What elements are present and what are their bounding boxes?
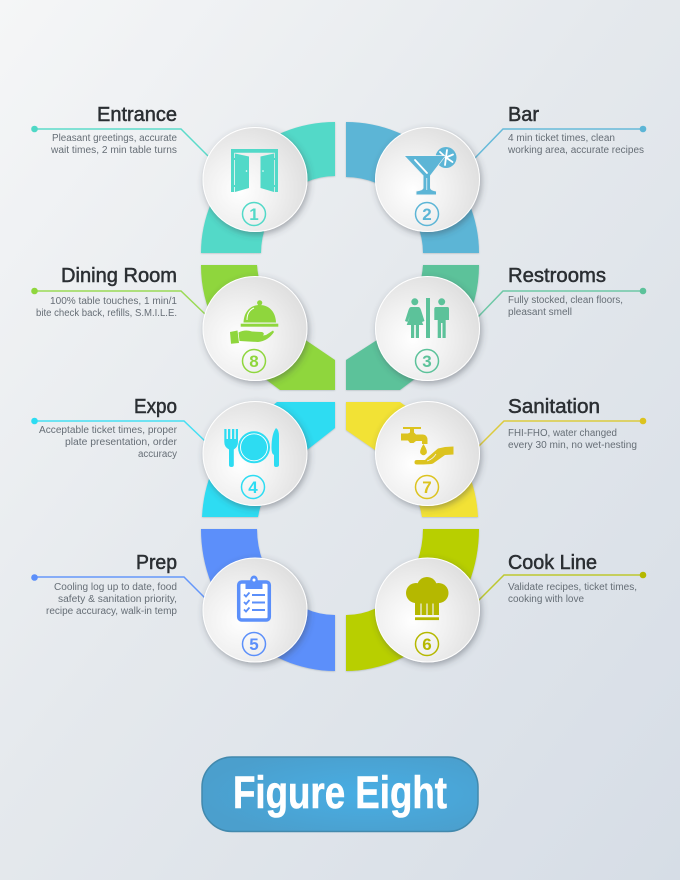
text: Prep details: safety & sanitation priority, [58, 594, 177, 605]
number 1: 1 [249, 205, 259, 224]
ring segment 6 [346, 529, 479, 671]
icon: martini [405, 147, 456, 194]
heading: Expo: Expo [134, 396, 177, 418]
circle 2 [376, 128, 480, 232]
heading: Bar: Bar [508, 104, 539, 126]
text: Restrooms details: pleasant smell [508, 307, 572, 318]
title banner: Figure Eight [202, 757, 478, 832]
ring segment 1 [201, 122, 335, 253]
heading: Prep: Prep [136, 552, 177, 574]
panel: 7 Sanitation [346, 396, 646, 517]
panel: 1 Entrance [31, 104, 335, 253]
text: Restrooms details: Fully stocked, clean floors, [508, 295, 623, 306]
leader line 6 [478, 572, 646, 601]
text: Sanitation details: every 30 min, no wet-nesting [508, 440, 637, 451]
text: Cook Line details: cooking with love [508, 594, 584, 605]
heading: Sanitation: Sanitation [508, 396, 600, 418]
number 6 [416, 632, 438, 656]
text: Dining Room details: 100% table touches, 1 min/1 [50, 296, 177, 307]
text: Expo details: accuracy [138, 449, 177, 460]
circle 1 [203, 128, 307, 232]
panel: 2 Bar [346, 104, 646, 253]
text: Cook Line details: Validate recipes, ticket times, [508, 582, 637, 593]
circle 6 [376, 558, 480, 662]
ring segment 7 [346, 402, 478, 517]
icon: clipboard checklist [239, 576, 269, 620]
icon: doors [231, 149, 278, 192]
text: Bar details [507, 133, 644, 156]
text: Dining Room details [36, 296, 177, 319]
leader line 4 [31, 418, 205, 441]
text: Sanitation details [508, 428, 637, 451]
leader line 3 [478, 288, 646, 317]
circle 3 [376, 276, 480, 380]
circle 5 [203, 558, 307, 662]
circle 4 [203, 402, 307, 506]
number 2: 2 [422, 205, 432, 224]
number 4 [242, 476, 264, 498]
panel: 3 Restrooms [346, 265, 646, 390]
number 4: 4 [248, 478, 258, 497]
text: Expo details: plate presentation, order [65, 437, 178, 448]
number 7: 7 [422, 478, 432, 497]
panel: 6 Cook Line [346, 529, 646, 671]
number 6: 6 [422, 635, 432, 654]
leader line 7 [479, 418, 646, 446]
text: Expo details: Acceptable ticket times, proper [39, 425, 178, 436]
panel: 8 Dining Room [31, 265, 335, 390]
number 5: 5 [249, 635, 259, 654]
icon: fork, plate and knife [224, 428, 279, 467]
text: Restrooms details [508, 295, 623, 318]
text: Entrance details: Pleasant greetings, accurate [52, 133, 177, 144]
leader line 1 [31, 126, 208, 156]
ring segment 8 [201, 265, 335, 390]
text: Sanitation details: FHI-FHO, water changed [508, 428, 617, 439]
text: Entrance details [50, 133, 177, 156]
icon: cloche and hand [230, 300, 278, 344]
number 2 [416, 202, 438, 226]
number 3 [416, 350, 438, 372]
heading: Restrooms: Restrooms [508, 265, 606, 287]
text: Entrance details: wait times, 2 min table turns [50, 145, 177, 156]
ring segment 2 [346, 122, 479, 253]
icon: chef hat [406, 577, 448, 620]
heading: Entrance: Entrance [97, 104, 177, 126]
text: Dining Room details: bite check back, refills, S.M.I.L.E. [36, 308, 177, 319]
ring segment 4 [202, 402, 335, 517]
text: Prep details: Cooling log up to date, food [54, 582, 177, 593]
text: Expo details [39, 425, 178, 460]
number 8: 8 [249, 352, 259, 371]
heading: Dining Room: Dining Room [61, 265, 177, 287]
text: Cook Line details [508, 582, 637, 605]
leader line 2 [475, 126, 646, 158]
ring segment 5 [201, 529, 335, 671]
icon: restroom figures [405, 298, 449, 338]
panel: 4 Expo [31, 396, 335, 517]
text: Prep details: recipe accuracy, walk-in temp [46, 606, 177, 617]
title banner: Figure Eight: Figure Eight [233, 767, 447, 818]
leader line 5 [31, 574, 205, 598]
circle 8 [203, 276, 307, 380]
number 7 [416, 476, 438, 498]
circle 7 [376, 402, 480, 506]
number 5 [242, 632, 266, 656]
number 1 [242, 202, 266, 226]
text: Bar details: working area, accurate recipes [507, 145, 644, 156]
leader line 8 [31, 288, 205, 314]
number 8 [242, 350, 266, 372]
icon: faucet, drop and hand [401, 427, 454, 464]
heading: Cook Line: Cook Line [508, 552, 597, 574]
ring segment 3 [346, 265, 479, 390]
text: Bar details: 4 min ticket times, clean [508, 133, 615, 144]
panel: 5 Prep [31, 529, 335, 671]
text: Prep details [46, 582, 177, 617]
number 3: 3 [422, 352, 432, 371]
